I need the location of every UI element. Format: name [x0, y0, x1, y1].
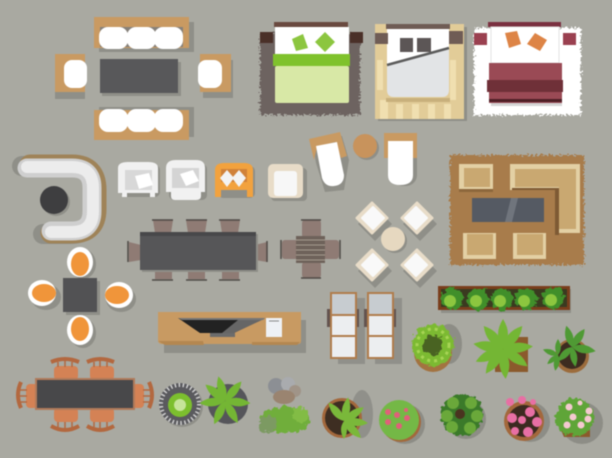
plant: dark leaves in round pot — [542, 325, 596, 373]
left chair — [55, 54, 87, 99]
plant: dark green star shrub — [441, 394, 486, 439]
plant: green with pink flowers — [379, 400, 425, 444]
table top — [140, 232, 258, 272]
pair of sun loungers — [327, 292, 402, 364]
plant: leafy shrub on gravel — [199, 375, 251, 426]
chairs — [28, 247, 136, 348]
round table — [381, 227, 407, 253]
paper — [266, 318, 282, 337]
chairs — [26, 366, 144, 422]
plant: green with white blossoms — [556, 398, 603, 444]
l-shaped sofa — [510, 164, 580, 235]
curved sectional sofa with round table — [22, 165, 96, 234]
plant: rocks and ground cover — [259, 377, 310, 433]
orange armchair — [215, 163, 255, 198]
tilted lounge chair — [309, 132, 349, 192]
bed with red duvet on white rug — [474, 22, 581, 115]
ground cover — [259, 407, 310, 433]
sofa — [22, 165, 96, 234]
straight lounge chair — [384, 133, 417, 186]
square table with four orange chairs — [28, 247, 136, 348]
rug — [450, 155, 584, 265]
white armchair — [118, 162, 160, 197]
row of armchairs — [118, 160, 307, 201]
four diamond chairs with round table — [357, 203, 437, 288]
plant: pink flowers in round pot — [504, 396, 550, 442]
white armchair with seat — [166, 160, 207, 200]
plant: fern in round pot — [412, 324, 462, 372]
lounge dining set: sofas, table and chairs — [55, 17, 233, 140]
planter box with five bushes — [438, 286, 571, 313]
monitor — [178, 318, 265, 337]
plant: broad leaves in square pot — [473, 319, 533, 379]
plant: palm in round pot — [322, 390, 373, 441]
right chair — [198, 54, 233, 98]
cream armchair — [268, 164, 307, 201]
round table — [40, 186, 70, 216]
two lounge chairs with round side table — [309, 132, 417, 192]
top sofa — [94, 17, 194, 52]
bottom sofa — [94, 107, 194, 140]
plant: round shrub on gravel — [159, 383, 203, 427]
bed with green duvet on dark rug — [260, 22, 363, 115]
desk with monitor and paper — [158, 312, 306, 353]
center table — [100, 59, 181, 96]
glass coffee table — [472, 198, 544, 222]
table top — [63, 278, 100, 315]
chairs — [129, 220, 267, 279]
small slatted table with four chairs — [281, 220, 340, 278]
round side table — [353, 134, 379, 160]
living room set on brown rug — [450, 155, 584, 265]
wood dining table with six chairs — [18, 359, 152, 430]
table top — [35, 378, 135, 410]
rocks — [268, 377, 301, 404]
armchairs — [459, 164, 546, 259]
bed with grey duvet on wood rug — [375, 24, 467, 121]
long dining table with chairs — [128, 220, 267, 280]
